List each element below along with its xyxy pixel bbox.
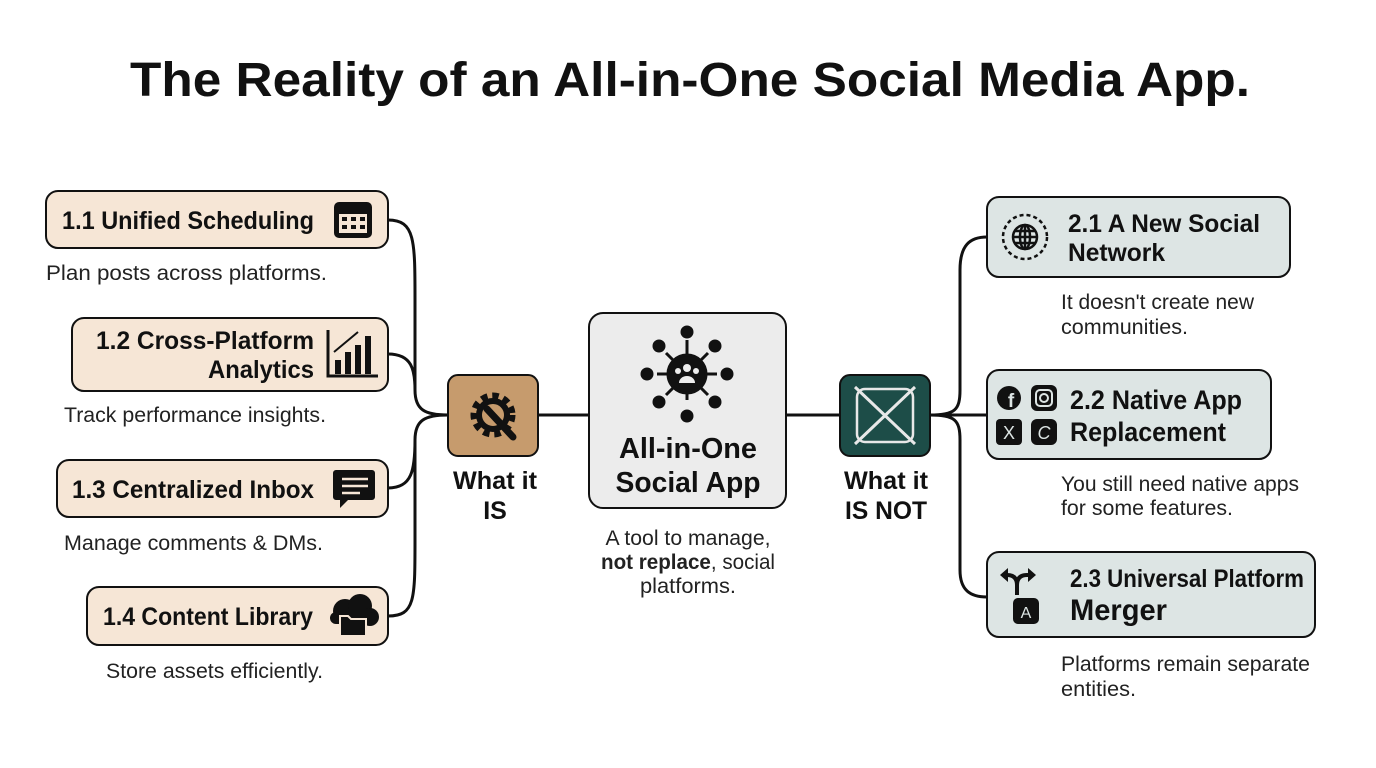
panel: 1.1 Unified Scheduling (46, 191, 388, 248)
panel: 2.1 new social network: Network (1068, 239, 1165, 267)
label: what it is not: What it (844, 467, 929, 495)
panel: 1.3 Centralized Inbox (57, 460, 388, 517)
label: what it is not: IS NOT (845, 497, 927, 525)
text: plan posts: Plan posts across platforms. (46, 262, 327, 285)
icon: social logos: C (1038, 423, 1052, 443)
panel: 1.4 Content Library (87, 587, 388, 645)
panel: 2.3 universal platform merger: 2.3 Universal Platform (1070, 565, 1304, 593)
icon: tan gear wrench box (448, 375, 538, 456)
icon: network hub (642, 327, 732, 421)
text: track: Track performance insights. (64, 404, 326, 427)
panel: 1.2 Cross-Platform Analytics (72, 318, 388, 391)
text: caption: not replace, social (601, 551, 775, 574)
icon: chart (328, 330, 378, 376)
text: store: Store assets efficiently. (106, 660, 323, 683)
icon: globe (1003, 215, 1047, 259)
icon: calendar (334, 202, 372, 238)
panel: 2.3 universal platform merger (987, 552, 1315, 637)
icon: chat (333, 470, 375, 508)
icon: split arrows: A (1021, 605, 1032, 622)
text: caption: A tool to manage, (606, 527, 770, 550)
text: desc 2.3: Platforms remain separate (1061, 653, 1310, 676)
text: desc 2.2 (1061, 473, 1299, 520)
text: caption (601, 527, 775, 598)
text: desc 2.1 (1061, 291, 1255, 339)
label: what it is (453, 467, 538, 525)
text: desc 2.1: It doesn't create new (1061, 291, 1255, 314)
text: caption: platforms. (640, 575, 736, 598)
panel: 1.4 Content Library: 1.4 Content Library (103, 603, 313, 631)
icon: social logos (996, 385, 1057, 445)
panel: 2.1 new social network: 2.1 A New Social (1068, 210, 1260, 238)
label: what it is: IS (483, 497, 507, 525)
panel: 2.2 native app replacement (987, 370, 1271, 459)
label: what it is: What it (453, 467, 538, 495)
text: desc 2.3: entities. (1061, 678, 1136, 701)
icon: cloud folder (330, 594, 379, 636)
icon: teal crossed box (840, 375, 930, 456)
title: The Reality of an All-in-One Social Media App. (130, 54, 1250, 107)
panel: 1.1 Unified Scheduling: 1.1 Unified Scheduling (62, 207, 314, 235)
panel: 1.2 Cross-Platform Analytics: Analytics (208, 356, 314, 384)
panel: center all-in-one: Social App (616, 467, 760, 499)
panel: 2.1 new social network (987, 197, 1290, 277)
panel: center all-in-one: All-in-One (619, 433, 757, 465)
panel: 1.2 Cross-Platform Analytics: 1.2 Cross-Platform (96, 327, 314, 355)
panel: center all-in-one (589, 313, 786, 508)
panel: 2.3 universal platform merger: Merger (1070, 594, 1167, 627)
text: desc 2.1: communities. (1061, 316, 1188, 339)
text: desc 2.2: for some features. (1061, 497, 1233, 520)
connectors left (388, 220, 987, 616)
icon: split arrows (1000, 568, 1039, 624)
panel: 2.2 native app replacement: 2.2 Native App (1070, 385, 1242, 415)
text: desc 2.2: You still need native apps (1061, 473, 1299, 496)
icon: social logos: f (1008, 391, 1015, 412)
text: manage: Manage comments & DMs. (64, 532, 323, 555)
panel: 1.3 Centralized Inbox: 1.3 Centralized Inbox (72, 476, 314, 504)
text: desc 2.3 (1061, 653, 1310, 701)
panel: 2.2 native app replacement: Replacement (1070, 417, 1226, 447)
label: what it is not (844, 467, 929, 525)
icon: social logos: X (1003, 423, 1015, 443)
